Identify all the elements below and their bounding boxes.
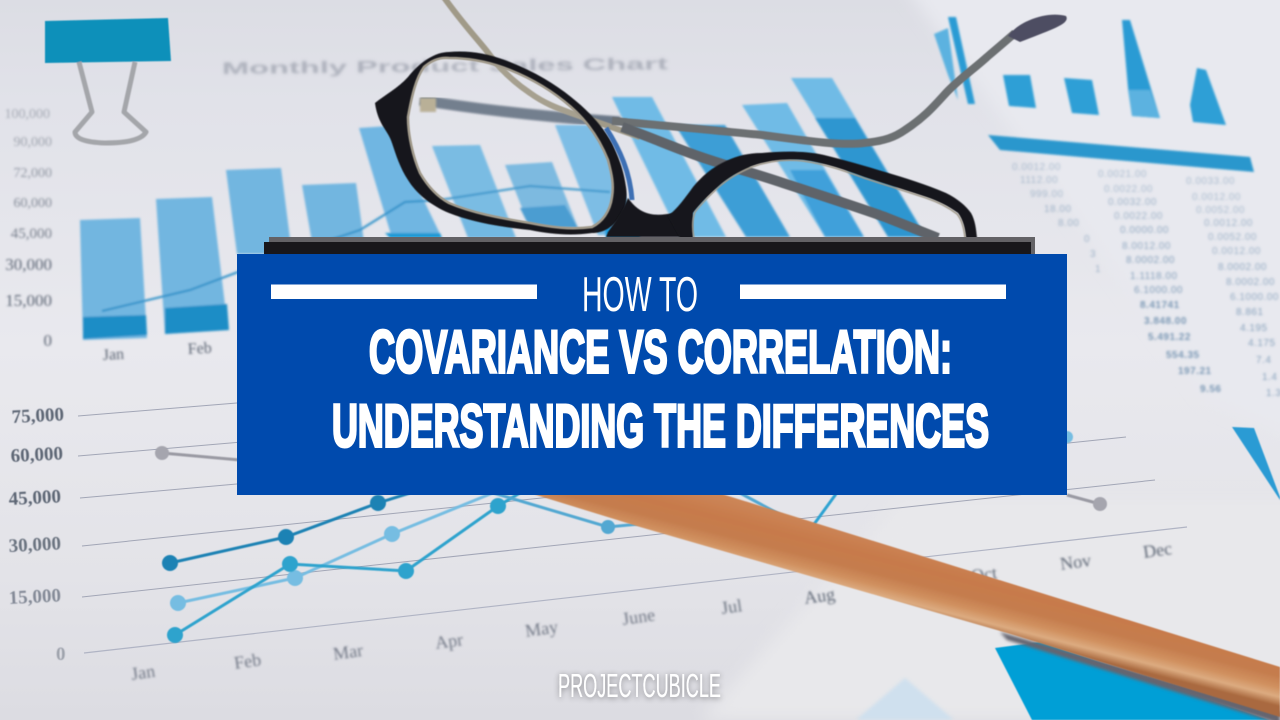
table numbers: 0.0022.00 — [1104, 184, 1153, 195]
y axis labels: 45,000 — [11, 226, 52, 242]
bars — [80, 78, 926, 340]
table numbers: 0.0012.00 — [1212, 246, 1261, 257]
bridge — [606, 198, 681, 237]
table numbers: 0.0021.00 — [1098, 169, 1147, 180]
table numbers: 3 — [1090, 249, 1096, 260]
pencil shadow — [1000, 632, 1280, 720]
table numbers: 0.0052.00 — [1208, 232, 1257, 243]
y axis labels — [4, 107, 52, 350]
x axis labels: Dec — [1142, 538, 1173, 562]
x axis labels: Jan — [130, 661, 156, 684]
eyebrow: how to: HOW TO — [582, 268, 698, 322]
table numbers: 0.0022.00 — [1114, 211, 1163, 222]
x axis labels: Aug — [803, 584, 836, 608]
table numbers: 4.175 — [1248, 338, 1276, 349]
folded arm seen through lens — [420, 100, 620, 122]
y axis labels: 15,000 — [8, 585, 61, 609]
y axis labels: 60,000 — [14, 196, 52, 211]
table numbers: 8.0012.00 — [1122, 241, 1171, 252]
x axis labels: Apr — [434, 629, 464, 653]
series: medium blue — [167, 490, 525, 643]
right lens inner rim — [693, 160, 965, 238]
table numbers: 8.861 — [1236, 307, 1264, 318]
banner backing: gray — [269, 237, 1035, 267]
x axis labels: Oct — [970, 563, 998, 586]
table numbers: 1.1118.00 — [1130, 271, 1178, 282]
pencil body — [520, 490, 1280, 717]
x axis labels: Jul — [720, 595, 743, 618]
left temple arm — [443, 0, 640, 137]
table numbers: 0.0012.00 — [1012, 162, 1061, 173]
table numbers: 8.00 — [1058, 218, 1079, 229]
right lens frame — [668, 152, 977, 238]
y axis labels: 75,000 — [11, 404, 64, 428]
right temple arm — [612, 33, 1015, 144]
pie chart wedges — [856, 427, 1280, 720]
panel: blurred monthly bar chart — [4, 54, 926, 364]
lens edge highlight — [606, 128, 632, 200]
y axis labels: 15,000 — [5, 291, 52, 310]
table numbers: 5.491.22 — [1148, 332, 1191, 343]
table numbers: 6.1000.00 — [1134, 285, 1183, 296]
x axis labels — [130, 538, 1173, 684]
table numbers: 0 — [1084, 234, 1090, 245]
x axis labels: Feb — [233, 649, 262, 673]
left rule — [271, 284, 537, 299]
table numbers: 0.0052.00 — [1196, 205, 1245, 216]
wedge: pale blue — [856, 678, 954, 720]
icon: binder clip — [45, 18, 171, 143]
table numbers: 1 — [1095, 264, 1101, 275]
table numbers: 4.195 — [1240, 323, 1268, 334]
y axis labels: 45,000 — [8, 486, 61, 510]
y axis labels: 30,000 — [5, 255, 52, 274]
table numbers: 1112.00 — [1020, 175, 1058, 186]
y axis labels: 0 — [56, 644, 66, 665]
table numbers: 8.0002.00 — [1218, 262, 1267, 273]
table numbers: 18.00 — [1044, 204, 1072, 215]
small bar charts — [934, 17, 1226, 125]
y axis labels: 100,000 — [4, 107, 50, 122]
table numbers: 0.0012.00 — [1192, 192, 1241, 203]
x axis labels: Mar — [332, 640, 364, 664]
right rule — [740, 284, 1006, 299]
x axis labels: Feb — [187, 340, 212, 358]
y axis labels: 72,000 — [14, 166, 52, 181]
y axis labels: 30,000 — [8, 533, 61, 557]
table numbers: 3.848.00 — [1144, 316, 1187, 327]
series: steel blue — [490, 492, 836, 534]
table numbers — [1012, 162, 1280, 399]
panel: blurred report table and small bars — [934, 17, 1280, 399]
table numbers: 0.0032.00 — [1108, 197, 1157, 208]
x axis labels: Jan — [102, 346, 125, 364]
panel: blurred line chart — [8, 370, 1187, 684]
table numbers: 999.00 — [1030, 189, 1064, 200]
banner backing: black — [264, 242, 1031, 267]
y axis labels: 60,000 — [10, 443, 63, 467]
brand wordmark: PROJECTCUBICLE — [558, 667, 721, 704]
left lens inner rim — [408, 58, 613, 228]
table numbers: 197.21 — [1178, 366, 1212, 377]
x axis labels: June — [621, 605, 656, 629]
y axis labels — [8, 404, 66, 665]
banner panel — [237, 254, 1067, 495]
y axis labels: 0 — [44, 331, 52, 350]
lower temple arm — [622, 127, 938, 238]
icon: eyeglasses — [375, 0, 1067, 238]
hinge — [420, 98, 436, 112]
table numbers: 0.0000.00 — [1120, 225, 1169, 236]
wedge: bright blue — [995, 642, 1270, 720]
y axis labels: 90,000 — [14, 135, 52, 150]
table numbers: 0.0033.00 — [1186, 176, 1235, 187]
series: dark blue — [162, 493, 410, 571]
gridlines — [78, 370, 1187, 653]
temple tip — [1008, 15, 1067, 42]
x axis labels: May — [524, 617, 559, 641]
table header band — [988, 135, 1254, 172]
x axis labels — [102, 340, 212, 364]
chart title: Monthly Product Sales Chart — [222, 54, 669, 78]
table numbers: 8.0002.00 — [1126, 255, 1175, 266]
icon: pencil — [520, 490, 1280, 720]
trend line — [102, 186, 610, 311]
table numbers: 1.4 — [1262, 372, 1277, 383]
table numbers: 8.41741 — [1140, 300, 1180, 311]
table numbers: 554.35 — [1166, 350, 1200, 361]
table numbers: 6.1000.00 — [1230, 292, 1279, 303]
table numbers: 9.56 — [1200, 384, 1221, 395]
series: gray — [155, 446, 1107, 511]
series: light blue — [170, 431, 1073, 611]
x axis labels: Nov — [1059, 550, 1092, 574]
wedge: right edge — [1232, 427, 1280, 500]
table numbers: 7.4 — [1256, 355, 1271, 366]
table numbers: 8.0002.00 — [1226, 277, 1275, 288]
left lens frame — [375, 51, 627, 234]
table numbers: 0.0012.00 — [1204, 218, 1253, 229]
